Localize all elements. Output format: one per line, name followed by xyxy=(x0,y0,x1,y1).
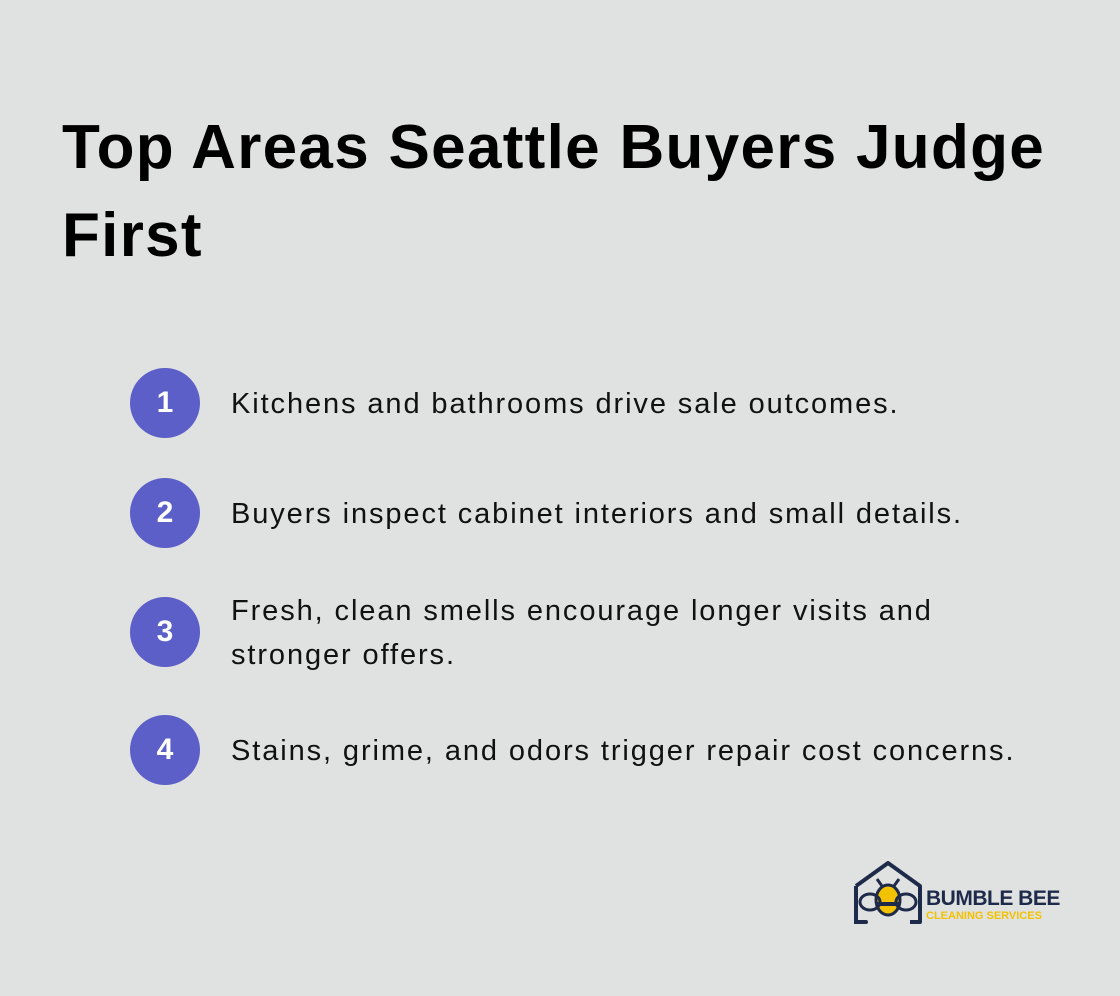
item 1 xyxy=(130,368,899,438)
item 4: 4 xyxy=(157,733,173,766)
logo xyxy=(854,861,1060,924)
title: Top Areas Seattle Buyers Judge First xyxy=(62,113,1045,270)
item 4: Stains, grime, and odors trigger repair cost concerns. xyxy=(231,735,1015,767)
item 1: Kitchens and bathrooms drive sale outcomes. xyxy=(231,388,899,420)
item 3: Fresh, clean smells encourage longer visits and stronger offers. xyxy=(231,595,933,671)
item 2: Buyers inspect cabinet interiors and small details. xyxy=(231,498,963,530)
logo: CLEANING SERVICES xyxy=(926,910,1042,922)
icon: bee house xyxy=(854,861,922,924)
item 4 xyxy=(130,715,1015,785)
item 2: 2 xyxy=(157,496,173,529)
item 1: 1 xyxy=(157,386,173,419)
item 2 xyxy=(130,478,963,548)
item 3: 3 xyxy=(157,615,173,648)
logo text: BUMBLE BEE xyxy=(926,887,1060,910)
